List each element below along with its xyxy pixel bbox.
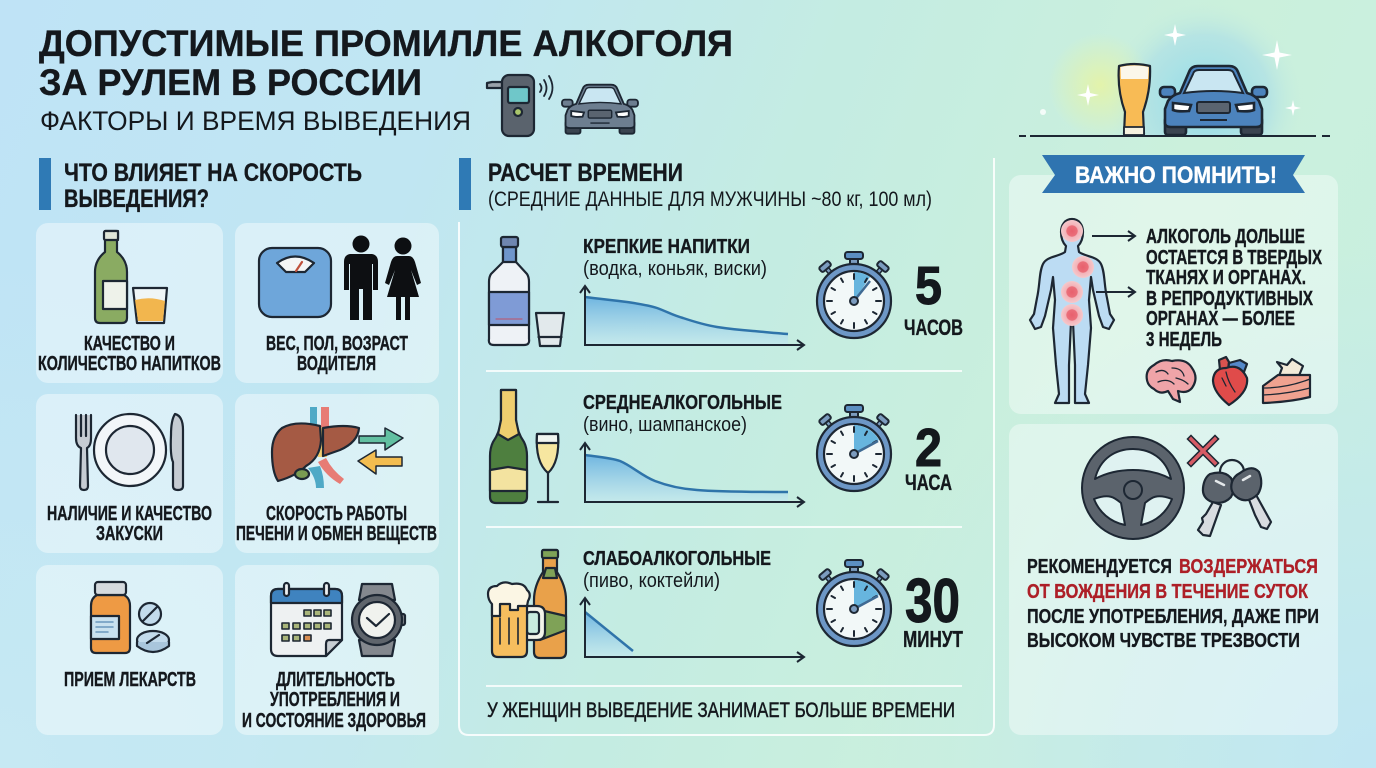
text: recommendation: ВЫСОКОМ ЧУВСТВЕ ТРЕЗВОСТИ: [1027, 629, 1300, 652]
subtitle: ФАКТОРЫ И ВРЕМЯ ВЫВЕДЕНИЯ: [40, 106, 471, 136]
icon: grey car: [562, 85, 638, 134]
card: duration and health: УПОТРЕБЛЕНИЯ И: [270, 688, 400, 711]
value: 2 hours: ЧАСА: [905, 470, 952, 495]
value: 30 minutes: МИНУТ: [903, 626, 963, 652]
banner: [1042, 155, 1305, 193]
icon: plate, fork and knife: [76, 414, 183, 490]
row: light drinks: (пиво, коктейли): [583, 570, 720, 592]
icon: beer glass: [1119, 64, 1150, 135]
panel: important to remember: [1009, 155, 1338, 414]
icon: beer bottle and mug: [488, 550, 566, 658]
icon: stopwatch 5 hours: [817, 252, 891, 338]
illustration: beer and car on the road: [1010, 0, 1376, 136]
card: liver and metabolism: [235, 394, 439, 553]
card: drinks quality: КАЧЕСТВО И: [84, 332, 175, 355]
value: 30 minutes: 30: [905, 567, 960, 636]
icon: liver: [272, 407, 359, 488]
icon: man and woman: [344, 236, 421, 320]
icon: brain: [1147, 360, 1196, 402]
arrow: body to text: [1096, 287, 1135, 297]
text: recommendation: РЕКОМЕНДУЕТСЯ: [1027, 555, 1172, 578]
title: [39, 22, 733, 103]
value: 5 hours: 5: [915, 256, 942, 316]
icon: champagne bottle and flute: [490, 390, 558, 503]
icon: steering wheel: [1082, 437, 1184, 539]
section heading: time calculation: РАСЧЕТ ВРЕМЕНИ: [488, 159, 683, 187]
icon: stopwatch 2 hours: [817, 405, 891, 491]
row: strong drinks: (водка, коньяк, виски): [583, 258, 767, 280]
icon: pill bottle and tablets: [91, 582, 169, 653]
icon: red cross: [1191, 439, 1215, 463]
card: duration and health: [235, 565, 439, 735]
note: women: У ЖЕНЩИН ВЫВЕДЕНИЕ ЗАНИМАЕТ БОЛЬШЕ ВРЕМЕНИ: [487, 699, 955, 722]
row: light drinks: [488, 547, 963, 662]
title: ДОПУСТИМЫЕ ПРОМИЛЛЕ АЛКОГОЛЯ: [39, 22, 733, 64]
icon: human body with organs: [1030, 219, 1114, 403]
row: medium drinks: [490, 390, 952, 507]
card: liver and metabolism: ПЕЧЕНИ И ОБМЕН ВЕЩЕСТВ: [236, 522, 437, 545]
section heading: factors: ВЫВЕДЕНИЯ?: [64, 185, 209, 213]
row: strong drinks: [489, 235, 963, 350]
section heading: factors: [39, 158, 362, 213]
row: strong drinks: КРЕПКИЕ НАПИТКИ: [583, 235, 750, 258]
row: medium drinks: (вино, шампанское): [583, 414, 747, 436]
chart: medium drinks elimination curve: [580, 443, 804, 507]
card: weight, sex, age: ВОДИТЕЛЯ: [297, 352, 376, 375]
value: 5 hours: [904, 256, 963, 340]
icon: heart: [1213, 357, 1247, 405]
text: recommendation: ОТ ВОЖДЕНИЯ В ТЕЧЕНИЕ СУТОК: [1027, 580, 1308, 603]
chart: light drinks elimination curve: [580, 598, 804, 662]
value: 2 hours: 2: [915, 418, 942, 478]
icon: bottle and glass: [95, 231, 167, 323]
arrow: head to text: [1092, 231, 1135, 241]
card: drinks quality: КОЛИЧЕСТВО НАПИТКОВ: [38, 352, 221, 375]
text: alcohol stays longer: ТКАНЯХ И ОРГАНАХ.: [1146, 266, 1306, 289]
card: snacks: [36, 394, 223, 553]
icon: exchange arrows: [358, 428, 403, 474]
icon: calendar: [271, 583, 342, 656]
value: 30 minutes: [903, 567, 963, 652]
panel: recommendation: [1009, 424, 1338, 735]
card: weight, sex, age: ВЕС, ПОЛ, ВОЗРАСТ: [266, 332, 408, 355]
icon: vodka bottle and shot glass: [489, 237, 564, 346]
value: 5 hours: ЧАСОВ: [904, 315, 963, 340]
chart: strong drinks elimination curve: [580, 286, 804, 350]
icon: tissue layers: [1263, 359, 1310, 403]
text: alcohol stays longer: 3 НЕДЕЛЬ: [1146, 328, 1222, 351]
icon: stopwatch 30 minutes: [817, 560, 891, 646]
text: alcohol stays longer: [1146, 225, 1322, 351]
text: recommendation: [1027, 555, 1319, 652]
text: recommendation: ВОЗДЕРЖАТЬСЯ: [1179, 555, 1318, 578]
text: alcohol stays longer: ОРГАНАХ — БОЛЕЕ: [1146, 307, 1295, 330]
row: light drinks: СЛАБОАЛКОГОЛЬНЫЕ: [583, 547, 771, 570]
value: 2 hours: [905, 418, 952, 495]
card: medication: ПРИЕМ ЛЕКАРСТВ: [64, 668, 196, 691]
card: duration and health: ДЛИТЕЛЬНОСТЬ: [276, 668, 395, 691]
card: duration and health: И СОСТОЯНИЕ ЗДОРОВЬЯ: [242, 709, 426, 732]
section heading: time calculation: (СРЕДНИЕ ДАННЫЕ ДЛЯ МУЖЧИНЫ ~80 кг, 100 мл): [488, 188, 932, 211]
text: alcohol stays longer: АЛКОГОЛЬ ДОЛЬШЕ: [1146, 225, 1305, 248]
row: medium drinks: СРЕДНЕАЛКОГОЛЬНЫЕ: [583, 391, 782, 414]
card: snacks: НАЛИЧИЕ И КАЧЕСТВО: [47, 502, 212, 525]
card: liver and metabolism: СКОРОСТЬ РАБОТЫ: [266, 502, 407, 525]
icon: blue car: [1160, 66, 1267, 135]
icon: breathalyzer: [487, 75, 552, 136]
icon: wristwatch: [352, 584, 405, 656]
icon: bathroom scale: [259, 248, 331, 317]
section heading: factors: ЧТО ВЛИЯЕТ НА СКОРОСТЬ: [64, 159, 362, 187]
card: medication: [36, 565, 223, 735]
section heading: time calculation: [459, 158, 932, 211]
card: drinks quality: [36, 223, 223, 383]
card: weight, sex, age: [235, 223, 439, 383]
card: snacks: ЗАКУСКИ: [96, 522, 163, 545]
text: alcohol stays longer: В РЕПРОДУКТИВНЫХ: [1146, 287, 1313, 310]
icon: car keys: [1198, 460, 1271, 536]
title: ЗА РУЛЕМ В РОССИИ: [39, 61, 422, 103]
banner: ВАЖНО ПОМНИТЬ!: [1075, 162, 1277, 189]
